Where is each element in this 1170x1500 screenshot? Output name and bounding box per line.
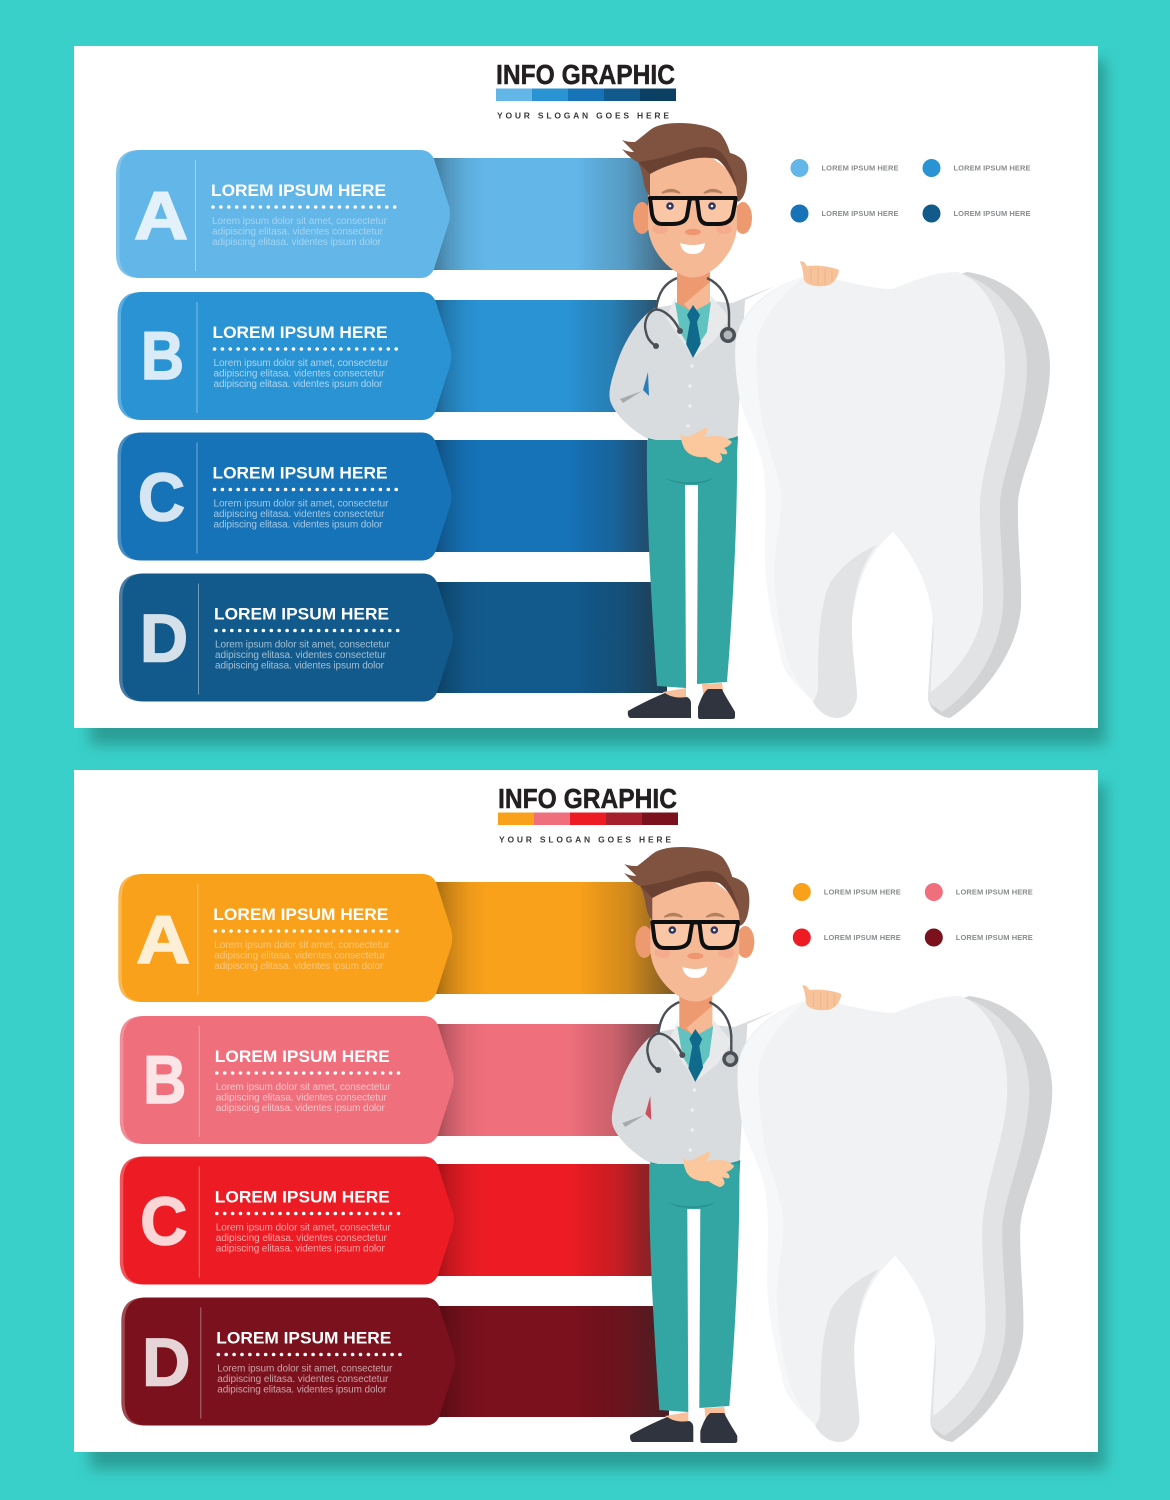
card C <box>120 1156 454 1284</box>
card A: Lorem ipsum dolor sit amet, consectetur <box>212 216 388 227</box>
card D: D <box>142 1324 190 1400</box>
legend: LOREM IPSUM HERE <box>954 209 1030 218</box>
card B: adipiscing elitasa. videntes ipsum dolor <box>216 1103 385 1114</box>
legend: LOREM IPSUM HERE <box>824 933 901 942</box>
card D <box>119 574 453 702</box>
card D: adipiscing elitasa. videntes consectetur <box>215 650 387 661</box>
card B: LOREM IPSUM HERE <box>212 323 388 342</box>
card C: LOREM IPSUM HERE <box>212 464 388 482</box>
card C: adipiscing elitasa. videntes ipsum dolor <box>216 1244 385 1254</box>
card A: Lorem ipsum dolor sit amet, consectetur <box>214 940 390 951</box>
card B: Lorem ipsum dolor sit amet, consectetur <box>214 358 389 369</box>
card A: adipiscing elitasa. videntes ipsum dolor <box>214 961 384 972</box>
slogan: YOUR SLOGAN GOES HERE <box>499 834 671 844</box>
card A: adipiscing elitasa. videntes consectetur <box>212 226 384 238</box>
card D: LOREM IPSUM HERE <box>214 604 389 624</box>
panel: blue infographic <box>74 46 1106 745</box>
card A: LOREM IPSUM HERE <box>211 181 386 200</box>
legend: LOREM IPSUM HERE <box>822 209 898 218</box>
title colour bar <box>498 812 678 825</box>
legend: LOREM IPSUM HERE <box>954 164 1030 173</box>
card A: LOREM IPSUM HERE <box>213 905 388 924</box>
card B: adipiscing elitasa. videntes ipsum dolor <box>214 379 383 390</box>
coat gap <box>643 372 649 396</box>
card B: LOREM IPSUM HERE <box>215 1047 390 1066</box>
card D: adipiscing elitasa. videntes ipsum dolor <box>217 1384 387 1396</box>
panel background <box>74 46 1098 728</box>
card D: LOREM IPSUM HERE <box>216 1328 391 1348</box>
card A <box>118 874 452 1002</box>
panel: red infographic <box>74 770 1106 1469</box>
card C: Lorem ipsum dolor sit amet, consectetur <box>216 1222 391 1234</box>
doctor illustration <box>612 847 777 1443</box>
card C: adipiscing elitasa. videntes consectetur <box>214 509 385 520</box>
card C: C <box>140 1184 187 1260</box>
large tooth illustration <box>738 985 1052 1442</box>
card A: A <box>134 178 188 254</box>
card C: LOREM IPSUM HERE <box>215 1188 390 1206</box>
legend: LOREM IPSUM HERE <box>822 164 898 173</box>
card A <box>116 150 450 278</box>
large tooth illustration <box>735 261 1050 718</box>
card B: adipiscing elitasa. videntes consectetur <box>214 368 385 380</box>
card B: B <box>143 1042 186 1118</box>
legend: LOREM IPSUM HERE <box>956 933 1033 942</box>
card D: Lorem ipsum dolor sit amet, consectetur <box>215 640 391 650</box>
card C: Lorem ipsum dolor sit amet, consectetur <box>214 498 389 510</box>
card C: C <box>138 460 185 536</box>
card C <box>118 432 452 560</box>
panel background <box>74 770 1098 1452</box>
title: INFO GRAPHIC <box>496 59 675 90</box>
legend <box>790 159 1030 222</box>
card D <box>121 1298 455 1426</box>
card B <box>118 292 452 420</box>
card D: adipiscing elitasa. videntes ipsum dolor <box>215 660 385 672</box>
ribbon bars <box>433 158 673 693</box>
legend: LOREM IPSUM HERE <box>824 888 901 897</box>
ribbon bars <box>435 882 675 1417</box>
panel shadow <box>90 60 1106 745</box>
doctor illustration <box>609 123 775 719</box>
card D: Lorem ipsum dolor sit amet, consectetur <box>217 1364 393 1374</box>
title colour bar <box>496 88 676 101</box>
card A: adipiscing elitasa. videntes ipsum dolor <box>212 237 382 248</box>
title: INFO GRAPHIC <box>498 783 677 814</box>
card B: adipiscing elitasa. videntes consectetur <box>216 1092 387 1104</box>
card D: D <box>140 600 188 676</box>
card C: adipiscing elitasa. videntes consectetur <box>216 1233 387 1244</box>
card C: adipiscing elitasa. videntes ipsum dolor <box>214 520 383 530</box>
legend: LOREM IPSUM HERE <box>956 888 1033 897</box>
card D: adipiscing elitasa. videntes consectetur <box>217 1374 389 1385</box>
card B: B <box>141 318 184 394</box>
legend <box>793 883 1033 946</box>
card A: adipiscing elitasa. videntes consectetur <box>214 950 386 962</box>
card B: Lorem ipsum dolor sit amet, consectetur <box>216 1082 391 1093</box>
slogan: YOUR SLOGAN GOES HERE <box>497 110 669 120</box>
card A: A <box>136 902 190 978</box>
coat gap <box>645 1096 651 1120</box>
panel shadow <box>90 784 1106 1469</box>
card B <box>120 1016 454 1144</box>
